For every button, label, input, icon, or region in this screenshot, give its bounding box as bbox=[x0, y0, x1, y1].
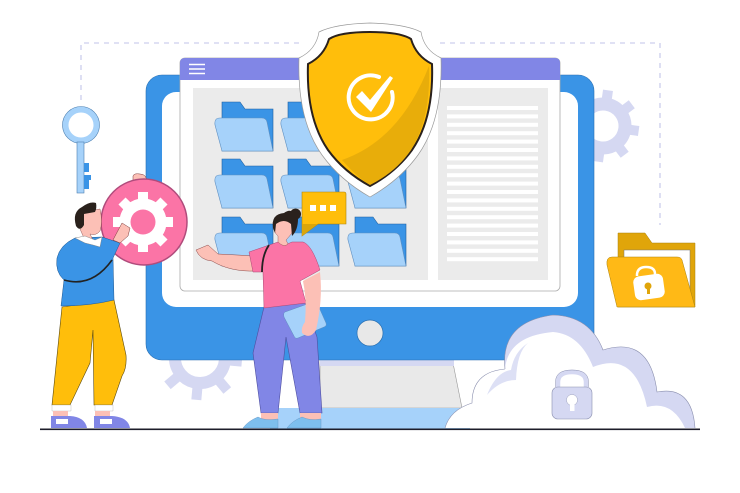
key bbox=[62, 106, 100, 193]
tablet bbox=[284, 302, 326, 338]
speech bubble bbox=[302, 192, 346, 236]
monitor body bbox=[146, 75, 594, 360]
shoes bbox=[52, 405, 113, 411]
locked folder bbox=[607, 233, 695, 307]
cloud with padlock bbox=[445, 315, 695, 428]
browser window bbox=[180, 58, 560, 291]
folder grid bbox=[215, 102, 406, 266]
hair bbox=[273, 209, 301, 236]
other arm bbox=[302, 272, 321, 336]
right document panel bbox=[438, 88, 548, 280]
left folder panel bbox=[193, 88, 428, 280]
trousers bbox=[253, 303, 322, 413]
collar bbox=[75, 236, 102, 247]
monitor stand bbox=[270, 358, 470, 429]
bag strap bbox=[64, 260, 112, 282]
monitor power button bbox=[357, 320, 383, 346]
padlock icon bbox=[632, 267, 666, 301]
arm hand bbox=[113, 223, 130, 243]
t-shirt bbox=[249, 242, 320, 308]
woman with tablet bbox=[196, 209, 326, 428]
feet bbox=[261, 413, 321, 421]
gear: behind monitor right bbox=[562, 85, 644, 167]
outstretched arm bbox=[196, 245, 256, 271]
shield with check mark bbox=[299, 23, 441, 197]
check icon bbox=[349, 75, 393, 119]
hair bbox=[75, 202, 96, 229]
cloud shading bbox=[487, 343, 528, 395]
dashed connector line bbox=[81, 43, 660, 225]
trousers bbox=[52, 300, 126, 405]
man holding gear disc bbox=[51, 174, 187, 428]
gear: behind monitor bottom bbox=[154, 329, 244, 404]
disc with gear bbox=[101, 179, 187, 265]
document lines bbox=[447, 106, 538, 261]
head and face bbox=[80, 209, 102, 240]
bag strap bbox=[262, 245, 269, 272]
menu icon bbox=[189, 64, 205, 74]
ground line bbox=[40, 428, 700, 430]
hand behind disc bbox=[133, 174, 147, 183]
head bbox=[273, 217, 292, 246]
jumper bbox=[57, 237, 120, 306]
padlock icon bbox=[552, 370, 592, 419]
